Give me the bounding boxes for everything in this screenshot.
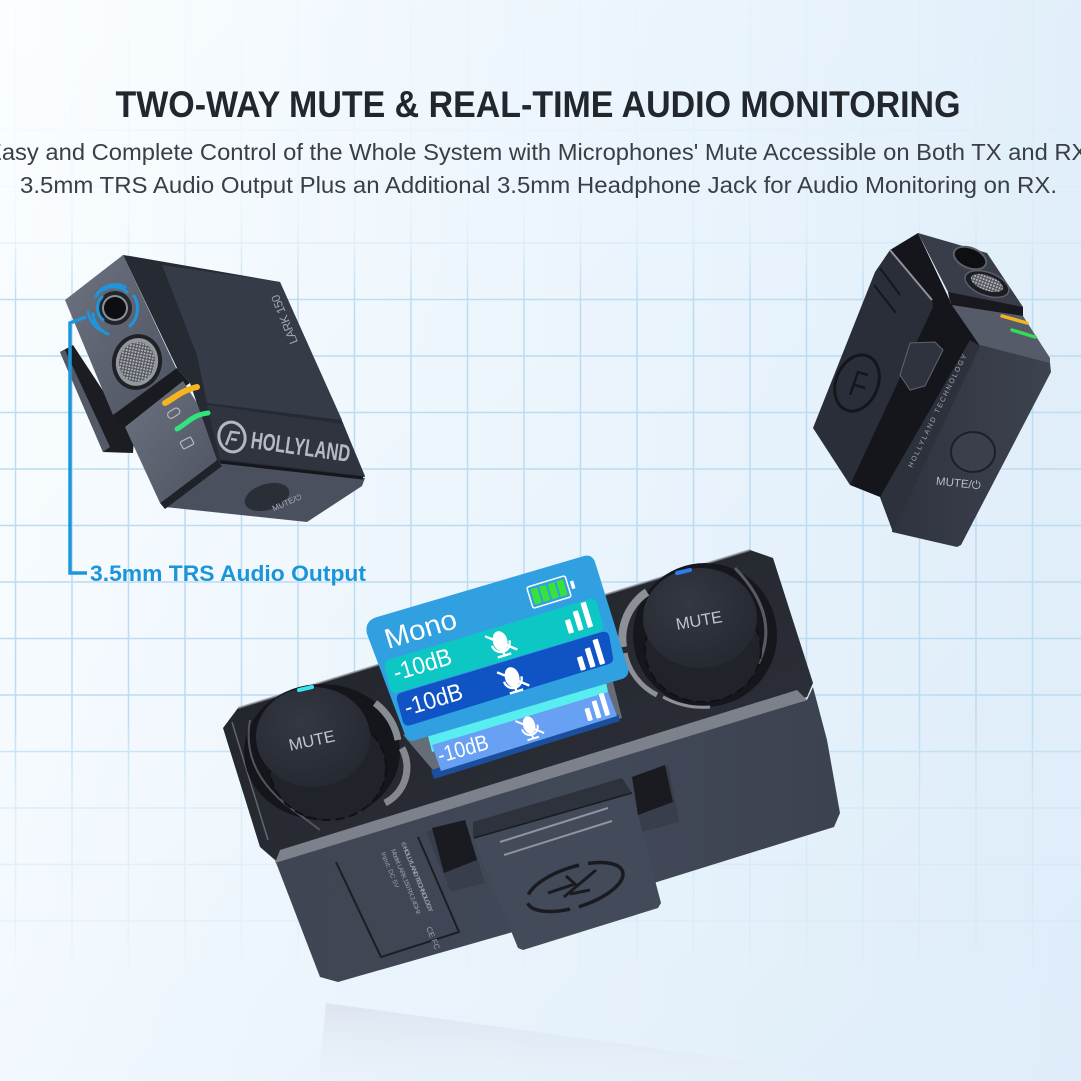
device: right transmitter [813, 233, 1051, 547]
knob: right [622, 563, 777, 707]
side text: HOLLYLAND TECHNOLOGY [908, 353, 969, 469]
blue row text: -10dB [401, 678, 466, 722]
icon: button on left transmitter [241, 478, 293, 516]
icon: usb symbol [166, 407, 181, 420]
indicator: left cyan light [299, 687, 312, 690]
icon: microphone port [107, 329, 167, 395]
icon: teal mute mic [485, 628, 518, 659]
hinge: left [426, 820, 485, 892]
icon: green LED [1012, 330, 1035, 337]
icon: blue mute mic [497, 664, 530, 695]
clip [473, 778, 661, 950]
icon: yellow LED [165, 387, 197, 403]
label panel [320, 837, 459, 957]
subtitle text: Easy and Complete Control of the Whole System with Microphones' Mute Accessible on Both TX and RX. [0, 139, 1081, 165]
icon: audio jack [950, 242, 990, 274]
teal row [385, 599, 603, 693]
panel text: © HOLLYLAND TECHNOLOGY [399, 841, 435, 914]
icon: teal signal bars [561, 602, 593, 634]
subtitle text [0, 139, 1081, 198]
device: main receiver [223, 550, 840, 982]
panel text [379, 841, 442, 951]
subtitle text: 3.5mm TRS Audio Output Plus an Additional 3.5mm Headphone Jack for Audio Monitoring on RX. [20, 172, 1057, 198]
lower blue row [432, 692, 617, 771]
callout label: 3.5mm TRS Audio Output [90, 561, 367, 586]
blue row [397, 632, 613, 726]
screen projection base [403, 670, 622, 776]
mono text: Mono [381, 603, 461, 655]
panel text: Input: DC 5V [379, 851, 400, 890]
icon: clip logo [521, 853, 629, 921]
panel text: Model: LARK 150 RX 2.4GHz [389, 848, 422, 916]
bevel strip [275, 690, 807, 863]
screen card [366, 556, 628, 741]
icon: hollyland logo [216, 419, 248, 455]
label: mute button: MUTE/⏻ [271, 492, 304, 513]
callout line [70, 317, 87, 573]
label: mute button: MUTE/⏻ [935, 475, 982, 492]
device: left transmitter [60, 255, 365, 522]
receiver top face [223, 550, 813, 860]
teal row text: -10dB [390, 643, 455, 687]
icon: mute button [951, 432, 995, 472]
clip of right transmitter [813, 250, 933, 485]
icon: battery [527, 574, 578, 608]
icon: lower mute mic [515, 714, 545, 742]
title: TWO-WAY MUTE & REAL-TIME AUDIO MONITORING [116, 84, 960, 125]
lower row text: -10dB [434, 729, 491, 768]
knob label: MUTE [287, 727, 337, 755]
icon: signal arcs around jack [88, 285, 138, 334]
icon: charge symbol [180, 437, 194, 449]
icon: audio jack [98, 291, 132, 325]
receiver front body [275, 687, 840, 982]
icon: microphone port [961, 265, 1013, 303]
indicator: right blue light [677, 570, 690, 573]
icon: green LED [177, 413, 208, 429]
knob: left [244, 684, 407, 830]
model text: LARK 150 [268, 292, 301, 346]
panel text: CE FC [424, 925, 442, 951]
knob label: MUTE [675, 608, 724, 634]
brand text: HOLLYLAND [249, 427, 352, 468]
icon: yellow LED [1002, 316, 1027, 323]
hinge [900, 342, 943, 390]
icon: lower signal bars [581, 693, 610, 721]
hinge: right [632, 765, 679, 832]
icon: blue signal bars [573, 639, 605, 671]
lower cyan row [428, 682, 610, 752]
